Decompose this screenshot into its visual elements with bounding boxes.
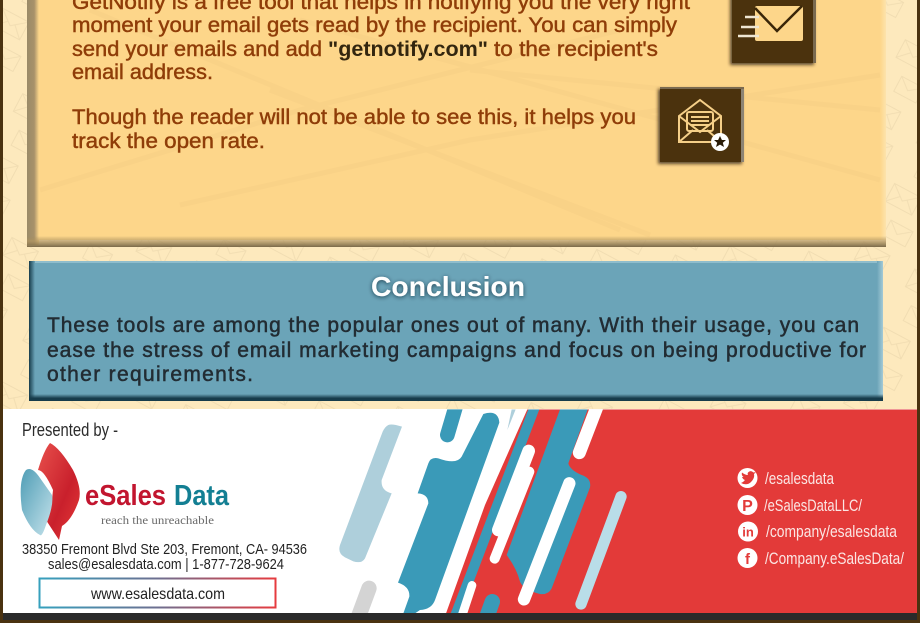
footer background <box>3 409 917 613</box>
footer diagonal graphic <box>339 403 917 623</box>
GetNotify description text: moment your email gets read by the recipient. You can simply <box>72 14 678 37</box>
conclusion body text: ease the stress of email marketing campaigns and focus on being productive for <box>47 339 866 362</box>
GetNotify description text <box>72 0 690 84</box>
eSales Data logo: reach the unreachable <box>101 513 214 527</box>
footer <box>3 403 917 623</box>
tracking note text: track the open rate. <box>72 130 265 153</box>
conclusion body text: These tools are among the popular ones out of many. With their usage, you can <box>47 314 859 337</box>
eSales Data logo: eSales <box>85 480 166 512</box>
address and contact: 38350 Fremont Blvd Ste 203, Fremont, CA- 94536 <box>22 541 307 558</box>
icon: flying envelope <box>732 0 816 63</box>
eSales Data logo: Data <box>174 480 230 512</box>
social links <box>738 468 904 568</box>
presented by label: Presented by - <box>22 420 118 440</box>
conclusion body text <box>47 314 866 386</box>
conclusion heading: Conclusion <box>371 271 525 302</box>
twitter link: /esalesdata <box>765 469 834 488</box>
panel: conclusion <box>29 261 883 401</box>
linkedin link <box>738 522 897 542</box>
icon: open envelope with star <box>660 87 744 162</box>
pinterest link <box>738 495 862 515</box>
twitter link <box>738 468 834 488</box>
conclusion body text: other requirements. <box>47 363 253 386</box>
linkedin link: in <box>742 524 754 540</box>
website box <box>40 578 276 608</box>
facebook link: f <box>745 551 751 568</box>
GetNotify description text: to the recipient's <box>494 38 658 61</box>
address and contact <box>22 541 307 573</box>
GetNotify description text: send your emails and add <box>72 38 322 61</box>
footer dark bar <box>3 613 917 620</box>
pinterest link: /eSalesDataLLC/ <box>764 496 862 515</box>
GetNotify description text: email address. <box>72 61 213 84</box>
panel: GetNotify <box>27 0 886 247</box>
website box: www.esalesdata.com <box>90 586 225 603</box>
pinterest link: P <box>742 498 753 515</box>
address and contact: sales@esalesdata.com | 1-877-728-9624 <box>48 556 284 573</box>
eSales Data logo <box>21 443 230 540</box>
tracking note text: Though the reader will not be able to see this, it helps you <box>72 106 636 129</box>
tracking note text <box>72 106 636 153</box>
panel background <box>27 0 886 247</box>
conclusion background <box>29 261 883 401</box>
GetNotify description text: "getnotify.com" <box>328 38 488 61</box>
